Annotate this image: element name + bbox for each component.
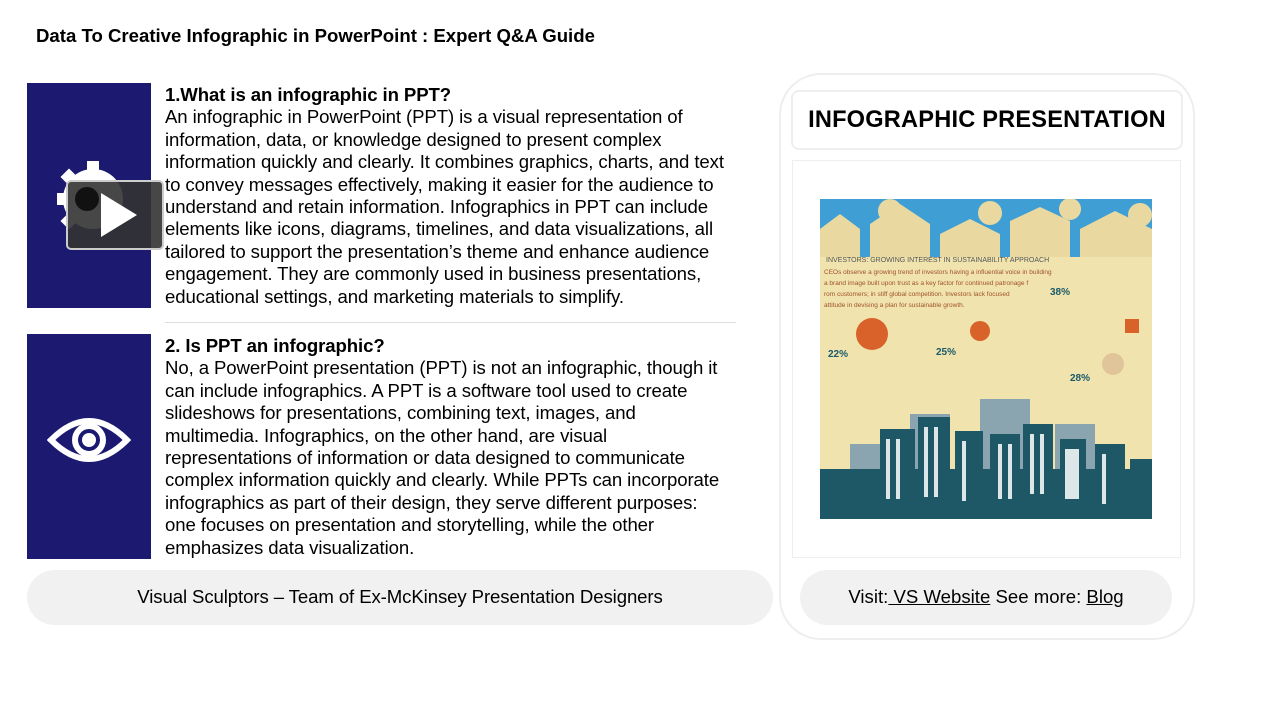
icon: gear with play button (57, 161, 164, 250)
footer pill: credits: Visual Sculptors – Team of Ex-McKinsey Presentation Designers (137, 586, 663, 607)
footer pill: links: Visit: VS Website See more: Blog (848, 586, 1124, 607)
chart: infographic thumbnail: INVESTORS: GROWING INTEREST IN SUSTAINABILITY APPROACH (826, 257, 1049, 264)
title: Data To Creative Infographic in PowerPoint : Expert Q&A Guide (36, 25, 595, 46)
chart: infographic thumbnail: 22% (828, 349, 848, 360)
image frame (792, 160, 1181, 558)
text block: question 2: No, a PowerPoint presentation (PPT) is not an infographic, though it can include infographics. A PPT is a software tool used to create slideshows for presentations, combining text, images, and multimedia. Infographics, on the other hand, are visual representations of information or data designed to communicate complex information quickly and clearly. While PPTs can incorporate infographics as part of their design, they serve different purposes: one focuses on presentation and storytelling, while the other emphasizes data visualization. (165, 357, 719, 558)
panel: right card (779, 73, 1195, 640)
text block: question 2: 2. Is PPT an infographic? (165, 335, 385, 356)
chart: infographic thumbnail: 28% (1070, 373, 1090, 384)
chart: infographic thumbnail: attitude in devising a plan for sustainable growth. (824, 302, 965, 309)
text block: question 1: An infographic in PowerPoint (PPT) is a visual representation of information, data, or knowledge designed to present complex information quickly and clearly. It combines graphics, charts, and text to convey messages effectively, making it easier for the audience to understand and retain information. Infographics in PPT can include elements like icons, diagrams, timelines, and data visualizations, all tailored to support the presentation’s theme and enhance audience engagement. They are commonly used in business presentations, educational settings, and marketing materials to simplify. (165, 106, 724, 307)
icon: eye (47, 418, 131, 462)
chart: infographic thumbnail: CEOs observe a growing trend of investors having a influential voice in building (824, 269, 1052, 276)
chart: infographic thumbnail (820, 199, 1152, 519)
panel: icon eye (27, 334, 151, 559)
chart: infographic thumbnail: 25% (936, 347, 956, 358)
heading: infographic presentation: INFOGRAPHIC PRESENTATION (808, 107, 1166, 133)
text block: question 1: 1.What is an infographic in PPT? (165, 84, 451, 105)
panel: icon gear/video (27, 83, 151, 308)
heading: infographic presentation (791, 90, 1183, 150)
chart: infographic thumbnail: rom customers; in stiff global competition. Investors lack focused (824, 291, 1010, 298)
footer pill: links (800, 570, 1172, 625)
chart: infographic thumbnail: 38% (1050, 287, 1070, 298)
chart: infographic thumbnail: a brand image built upon trust as a key factor for continued patronage f (824, 280, 1028, 287)
footer pill: credits (27, 570, 773, 625)
